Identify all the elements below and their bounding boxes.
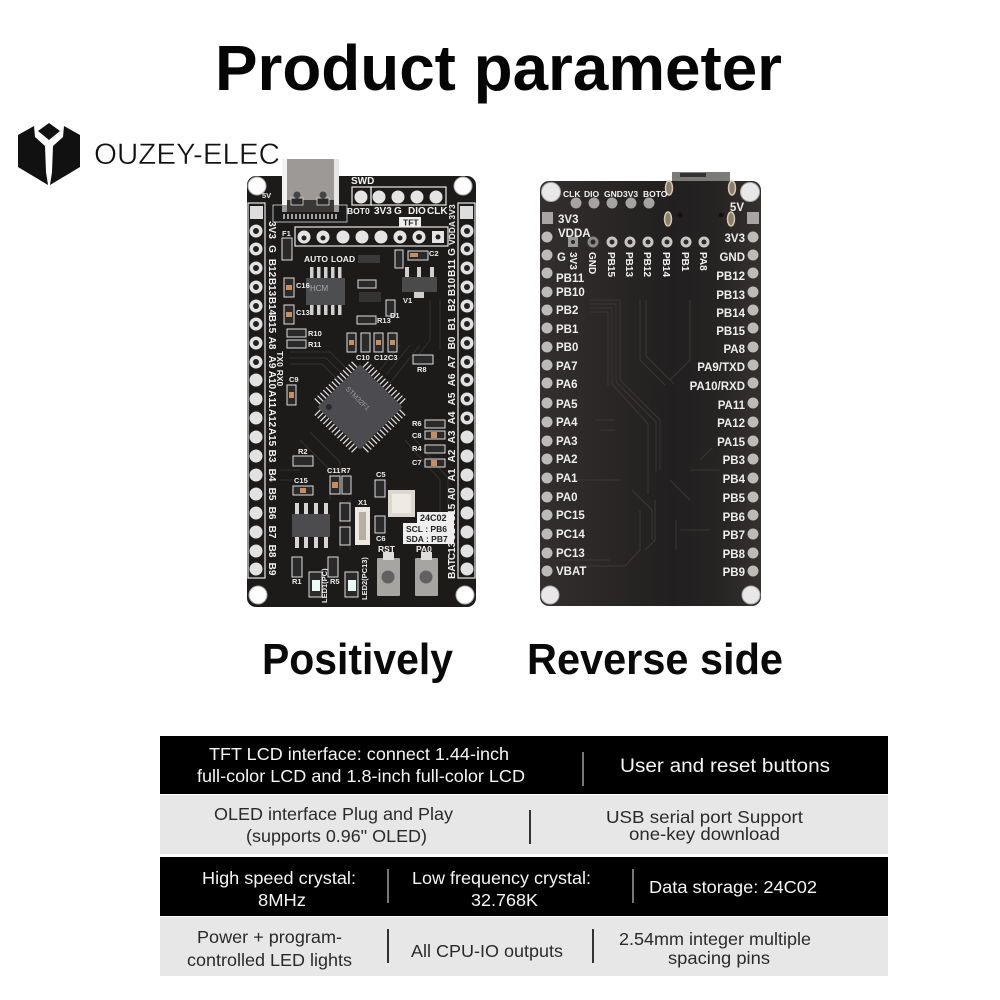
right vertical pin labels: B1: [447, 317, 458, 330]
rear left pads: [542, 212, 553, 576]
right vertical pin labels: VDDA: [447, 221, 457, 245]
rear header vertical labels: PB1: [679, 252, 690, 272]
front board photo: [247, 159, 476, 607]
rear USB connector and shield slots: [664, 172, 736, 226]
rear right pin labels: 3V3: [725, 233, 745, 245]
rear left pin labels: PC14: [556, 529, 585, 541]
USB-side and header labels: 5V: [262, 191, 271, 200]
feature row 2: one-key download: [629, 824, 780, 844]
component silkscreen labels: C8: [412, 431, 422, 440]
rear header vertical labels: GND: [586, 252, 597, 274]
component silkscreen labels: R2: [298, 447, 308, 456]
feature row 1: [160, 736, 888, 794]
component silkscreen labels: R5: [330, 577, 340, 586]
USB-side and header labels: SWD: [351, 176, 374, 187]
rear header vertical labels: PB12: [641, 252, 652, 277]
rear left pin labels: PC13: [556, 548, 585, 560]
feature row 3: Low frequency crystal:: [412, 868, 591, 888]
left vertical pin labels: [266, 221, 285, 576]
right vertical pin labels: A3: [447, 430, 458, 443]
logo: OUZEY-ELEC: OUZEY-ELEC: [94, 138, 280, 171]
feature row 3: 8MHz: [258, 890, 306, 910]
USB-side and header labels: AUTO: [304, 254, 328, 264]
CH340 USB chip: HCM: [310, 284, 329, 293]
rear board photo: [540, 172, 761, 606]
rear top labels: BOTO: [643, 189, 668, 199]
rear right pin labels: PA9/TXD: [697, 362, 745, 374]
component silkscreen labels: R8: [417, 365, 427, 374]
right vertical pin labels: B2: [447, 298, 458, 311]
left vertical pin labels: B14: [266, 297, 277, 316]
rear right pin labels: PA8: [723, 344, 746, 356]
caption: Reverse side: Reverse side: [527, 635, 783, 684]
CH340 USB chip: [306, 267, 345, 315]
rear left pin labels: [556, 214, 591, 578]
STM32 QFP microcontroller: STM32F1: [344, 386, 370, 413]
32.768K crystal: [388, 490, 415, 517]
left vertical pin labels: B3: [266, 450, 277, 463]
right vertical pin labels: A2: [447, 449, 458, 462]
feature row 4: controlled LED lights: [187, 950, 352, 970]
rear top labels: 3V3: [623, 189, 638, 199]
feature row 2: USB serial port Support: [606, 807, 803, 827]
left vertical pin labels: B5: [266, 488, 277, 501]
left vertical pin labels: G: [266, 245, 277, 253]
rear left pin labels: PA7: [556, 361, 578, 373]
transistors and small SMD parts: [282, 238, 445, 597]
right vertical pin labels: B11: [447, 259, 458, 277]
feature row 3: 32.768K: [471, 890, 538, 910]
front mounting holes: [248, 177, 474, 604]
component silkscreen labels: R10: [308, 329, 322, 338]
right vertical pin labels: C14: [447, 522, 458, 541]
rear header vertical labels: [567, 252, 708, 277]
24C02 EEPROM: [292, 503, 330, 548]
component silkscreen labels: PA0: [416, 544, 432, 554]
left vertical pin labels: A9: [266, 356, 277, 369]
USB-side and header labels: LOAD: [331, 254, 355, 264]
component silkscreen labels: C10: [356, 353, 370, 362]
component silkscreen labels: X1: [358, 498, 367, 507]
component silkscreen labels: C13: [296, 308, 310, 317]
component silkscreen labels: F1: [282, 229, 291, 238]
rear right pin labels: [690, 202, 746, 579]
front right pin column: [460, 206, 474, 576]
component silkscreen labels: C12: [374, 353, 388, 362]
right vertical pin labels: A7: [447, 355, 458, 368]
USB-C connector: [273, 159, 347, 222]
rear header vertical labels: PB15: [605, 252, 616, 277]
rear right pin labels: PA15: [717, 437, 746, 449]
rear left pin labels: PA2: [556, 454, 578, 466]
feature row 1: full-color LCD and 1.8-inch full-color LCD: [197, 766, 525, 786]
right vertical pin labels: [447, 204, 458, 579]
feature row 3: High speed crystal:: [202, 868, 356, 888]
feature row 4: spacing pins: [668, 948, 770, 968]
rear left pin labels: VBAT: [556, 566, 586, 578]
component silkscreen labels: C16: [296, 281, 310, 290]
feature row 3: [160, 857, 888, 916]
EEPROM info box: SCL : PB6: [406, 524, 447, 534]
rear right pin labels: PB3: [723, 455, 745, 467]
rear left pin labels: PA5: [556, 399, 578, 411]
feature row 2: [160, 795, 888, 854]
feature row 3: Data storage: 24C02: [649, 877, 817, 897]
component silkscreen labels: V1: [403, 296, 412, 305]
left vertical pin labels: A10: [266, 371, 277, 390]
pin header frames: [248, 187, 475, 578]
left vertical pin labels: 3V3: [266, 221, 277, 239]
EEPROM info box: SDA : PB7: [406, 534, 448, 544]
rear header vertical labels: PB13: [623, 252, 634, 277]
right vertical pin labels: A5: [447, 392, 458, 405]
component silkscreen labels: R1: [292, 577, 302, 586]
EEPROM info box: 24C02: [420, 513, 447, 523]
right vertical pin labels: A4: [447, 411, 458, 424]
left vertical pin labels: B8: [266, 545, 277, 558]
left vertical pin labels: B9: [266, 563, 277, 576]
rear left pin labels: PA4: [556, 417, 578, 429]
rear TFT header pads: [568, 236, 710, 248]
rear right pin labels: PA10/RXD: [690, 381, 745, 393]
right vertical pin labels: 3V3: [447, 204, 457, 220]
STM32 QFP microcontroller: [306, 353, 414, 461]
right vertical pin labels: G: [447, 248, 458, 256]
rear left pin labels: VDDA: [558, 228, 591, 240]
right vertical pin labels: A0: [447, 487, 458, 500]
feature row 2: OLED interface Plug and Play: [214, 804, 453, 824]
rear left pin labels: PB2: [556, 305, 578, 317]
8MHz crystal: [355, 507, 370, 545]
feature row 4: [160, 917, 888, 976]
component silkscreen labels: R7: [341, 466, 351, 475]
USB-side and header labels: DIO: [408, 206, 426, 217]
rear right pin labels: PB14: [716, 308, 746, 320]
rear left pin labels: G: [557, 252, 566, 264]
USB-side and header labels: TFT: [403, 218, 419, 228]
rear top labels: CLK: [563, 189, 581, 199]
feature row 4: 2.54mm integer multiple: [619, 929, 811, 949]
feature row 4: Power + program-: [197, 927, 342, 947]
component silkscreen labels: LED1(PC): [320, 568, 329, 603]
rear header vertical labels: 3V3: [567, 252, 578, 270]
rear left pin labels: PA1: [556, 473, 578, 485]
left vertical pin labels: B13: [266, 278, 277, 297]
rear left pin labels: PB10: [556, 287, 585, 299]
rear right pin labels: PB6: [723, 512, 745, 524]
front left pin column: [250, 206, 263, 576]
left vertical pin labels: A8: [266, 337, 277, 350]
rear right pin labels: PB15: [716, 326, 746, 338]
caption: Positively: Positively: [262, 635, 453, 684]
left vertical pin labels: A12: [266, 409, 277, 428]
rear right pin labels: PB8: [723, 549, 746, 561]
AMS1117 regulator: [402, 267, 437, 298]
USB-side and header labels: [262, 176, 448, 264]
rear left pin labels: PC15: [556, 510, 585, 522]
component silkscreen labels: C11: [327, 466, 340, 475]
feature row 1: User and reset buttons: [620, 756, 830, 777]
component silkscreen labels: R4: [412, 444, 422, 453]
right vertical pin labels: B10: [447, 277, 458, 296]
logo: OUZEY-ELEC: [18, 123, 280, 185]
component silkscreen labels: R11: [308, 340, 321, 349]
left vertical pin labels: B6: [266, 507, 277, 520]
feature row 4: All CPU-IO outputs: [411, 941, 563, 961]
rear left pin labels: PB1: [556, 324, 579, 336]
rear right pin labels: 5V: [730, 202, 744, 214]
rear left pin labels: PB11: [556, 273, 585, 285]
rear right pin labels: GND: [719, 252, 745, 264]
USB-side and header labels: 3V3: [374, 206, 392, 217]
component silkscreen labels: R13: [377, 316, 391, 325]
right vertical pin labels: BAT: [447, 559, 458, 579]
right vertical pin labels: B0: [447, 336, 458, 349]
rear mounting holes: [541, 182, 760, 604]
component silkscreen labels: C15: [294, 476, 308, 485]
rear right pads: [747, 212, 759, 576]
rear right pin labels: PA12: [717, 418, 745, 430]
rear top labels: GND: [604, 189, 623, 199]
rear right pin labels: PA11: [718, 400, 746, 412]
rear left pin labels: PA6: [556, 379, 578, 391]
rear header vertical labels: PA8: [697, 252, 708, 271]
title: Product parameter: [215, 32, 782, 104]
rear right pin labels: PB5: [723, 493, 746, 505]
rear top labels: DIO: [584, 189, 600, 199]
component silkscreen labels: LED2(PC13): [360, 557, 369, 600]
rear right pin labels: PB9: [723, 567, 745, 579]
component silkscreen labels: C7: [412, 458, 422, 467]
SWD and TFT pads: [298, 190, 444, 244]
feature row 1: TFT LCD interface: connect 1.44-inch: [209, 744, 509, 764]
left vertical pin labels: A15: [266, 428, 277, 447]
rear top header pads: [570, 198, 654, 208]
right vertical pin labels: C15: [447, 503, 458, 522]
rear left pin labels: PA3: [556, 436, 578, 448]
rear left pin labels: 3V3: [558, 214, 578, 226]
right vertical pin labels: A1: [447, 468, 458, 481]
left vertical pin labels: A11: [266, 390, 277, 408]
rear top labels: [563, 189, 668, 199]
left vertical pin labels: B12: [266, 259, 277, 278]
USB-side and header labels: CLK: [427, 206, 448, 217]
rear right pin labels: PB7: [723, 530, 745, 542]
component silkscreen labels: [282, 229, 439, 603]
left vertical pin labels: B15: [266, 315, 277, 334]
component silkscreen labels: C6: [376, 534, 386, 543]
feature row 2: (supports 0.96" OLED): [246, 826, 427, 846]
left vertical pin labels: RX0: [275, 370, 285, 387]
rear right pin labels: PB13: [716, 290, 745, 302]
rear left pin labels: PA0: [556, 492, 578, 504]
rear right pin labels: PB12: [716, 271, 745, 283]
front board traces: [280, 300, 448, 550]
component silkscreen labels: C9: [289, 375, 299, 384]
EEPROM info box: [403, 512, 454, 544]
right vertical pin labels: A6: [447, 373, 458, 386]
right vertical pin labels: C13: [447, 541, 458, 560]
USB-side and header labels: BOT0: [347, 206, 370, 216]
component silkscreen labels: C3: [388, 353, 398, 362]
component silkscreen labels: D1: [390, 311, 400, 320]
component silkscreen labels: R6: [412, 419, 422, 428]
left vertical pin labels: B4: [266, 469, 277, 482]
rear board traces: [560, 300, 720, 566]
component silkscreen labels: RST: [378, 544, 396, 554]
PA0 button: [415, 552, 438, 596]
USB-side and header labels: G: [394, 206, 402, 217]
component silkscreen labels: C2: [429, 249, 439, 258]
rear right pin labels: PB4: [723, 474, 746, 486]
left vertical pin labels: B7: [266, 526, 277, 539]
RST button: [377, 552, 400, 596]
rear header vertical labels: PB14: [660, 252, 671, 277]
rear left pin labels: PB0: [556, 342, 578, 354]
left vertical pin labels: TX0: [275, 351, 285, 367]
component silkscreen labels: C5: [376, 470, 386, 479]
